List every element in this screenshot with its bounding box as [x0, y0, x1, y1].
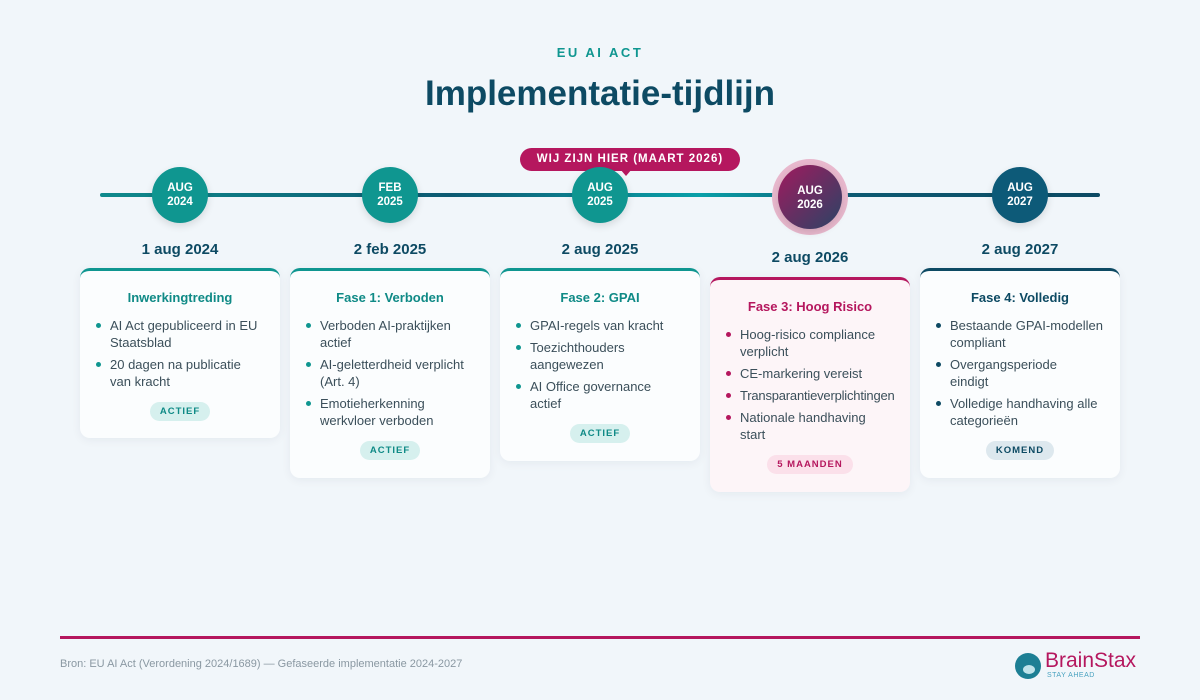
card: fase 3: Nationale handhaving: [740, 410, 866, 425]
card: fase 2: Toezichthouders: [530, 340, 625, 355]
card: fase 3: Transparantieverplichtingen: [740, 388, 895, 403]
card: fase 2: GPAI-regels van kracht: [530, 318, 663, 333]
card: inwerkingtreding: 20 dagen na publicatie: [110, 357, 241, 372]
card: fase 3: 5 MAANDEN: [777, 459, 843, 470]
card: fase 1: werkvloer verboden: [320, 413, 433, 428]
logo: brainstax: [1015, 649, 1136, 679]
card: inwerkingtreding: Staatsblad: [110, 335, 171, 350]
logo: brainstax: STAY AHEAD: [1047, 672, 1095, 679]
card: inwerkingtreding: AI Act gepubliceerd in EU: [110, 318, 257, 333]
card: fase 4: Volledige handhaving alle: [950, 396, 1097, 411]
card: fase 2: Fase 2: GPAI: [560, 290, 640, 305]
card: inwerkingtreding: Inwerkingtreding: [128, 290, 232, 305]
circle: aug 2025: 2025: [587, 196, 613, 208]
circle: aug 2026: [772, 159, 848, 235]
card: fase 4: Overgangsperiode: [950, 357, 1057, 372]
timeline line: [100, 193, 1100, 197]
callout: wij zijn hier: WIJ ZIJN HIER (MAART 2026): [537, 153, 723, 165]
card: fase 1: (Art. 4): [320, 374, 360, 389]
text: 2 aug 2025: [562, 241, 638, 258]
title: Implementatie-tijdlijn: [425, 74, 775, 113]
subtitle: EU AI ACT: [557, 45, 643, 60]
circle: aug 2027: 2027: [1007, 196, 1033, 208]
card: fase 1: [290, 268, 490, 478]
card: fase 4: KOMEND: [996, 445, 1044, 456]
card: fase 2: actief: [530, 396, 561, 411]
callout: wij zijn hier: [520, 148, 740, 171]
card: fase 4: [920, 268, 1120, 478]
card: fase 3: verplicht: [740, 344, 788, 359]
card: fase 4: compliant: [950, 335, 1006, 350]
card: fase 2: [500, 268, 700, 461]
circle: aug 2024: 2024: [167, 196, 193, 208]
text: 2 aug 2027: [982, 241, 1058, 258]
card: fase 2: aangewezen: [530, 357, 604, 372]
circle: aug 2026: AUG: [797, 185, 823, 197]
card: inwerkingtreding: van kracht: [110, 374, 170, 389]
card: fase 4: categorieën: [950, 413, 1018, 428]
card: fase 3: [710, 277, 910, 492]
card: fase 3: CE-markering vereist: [740, 366, 862, 381]
card: fase 2: AI Office governance: [530, 379, 651, 394]
card: fase 1: Emotieherkenning: [320, 396, 425, 411]
card: fase 2: ACTIEF: [580, 428, 620, 439]
card: fase 1: ACTIEF: [370, 445, 410, 456]
card: fase 3: Fase 3: Hoog Risico: [748, 299, 872, 314]
card: fase 1: Verboden AI-praktijken: [320, 318, 451, 333]
card: fase 4: Fase 4: Volledig: [971, 290, 1069, 305]
card: fase 3: start: [740, 427, 765, 442]
date labels: 1 aug 2024: [142, 241, 218, 258]
text: 2 aug 2026: [772, 249, 848, 266]
card: fase 4: eindigt: [950, 374, 988, 389]
circle: aug 2025: [572, 167, 628, 223]
source text: Bron: EU AI Act (Verordening 2024/1689) — Gefaseerde implementatie 2024-2027: [60, 658, 462, 670]
circle: aug 2027: [992, 167, 1048, 223]
card: fase 1: Fase 1: Verboden: [336, 290, 444, 305]
circle: aug 2024: [152, 167, 208, 223]
card: fase 3: Hoog-risico compliance: [740, 327, 875, 342]
logo: brainstax: BrainStax: [1045, 649, 1136, 672]
circle: feb 2025: FEB: [378, 182, 402, 194]
circle: aug 2026: 2026: [797, 199, 823, 211]
circle: feb 2025: [362, 167, 418, 223]
circle: aug 2024: AUG: [167, 182, 193, 194]
circle: feb 2025: 2025: [377, 196, 403, 208]
card: fase 1: actief: [320, 335, 351, 350]
circle: aug 2025: AUG: [587, 182, 613, 194]
card: inwerkingtreding: [80, 268, 280, 438]
card: fase 1: AI-geletterdheid verplicht: [320, 357, 464, 372]
text: 2 feb 2025: [354, 241, 426, 258]
footer divider: [60, 636, 1140, 639]
circle: aug 2027: AUG: [1007, 182, 1033, 194]
card: fase 4: Bestaande GPAI-modellen: [950, 318, 1103, 333]
card: inwerkingtreding: ACTIEF: [160, 406, 200, 417]
